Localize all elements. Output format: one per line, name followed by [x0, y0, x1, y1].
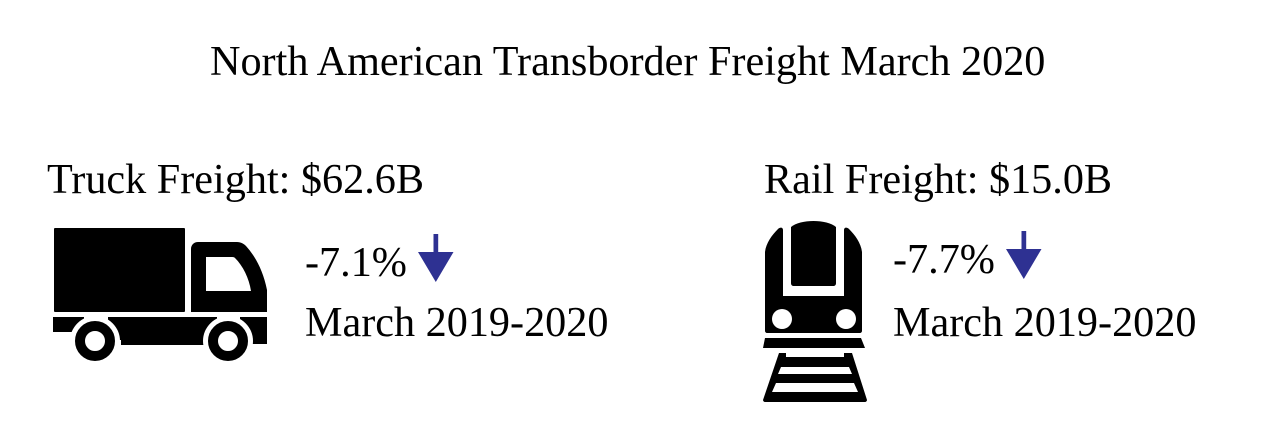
period: rail: March 2019-2020 [893, 298, 1196, 346]
change: rail percent: -7.7% [893, 236, 995, 283]
period: truck: March 2019-2020 [305, 298, 608, 346]
icon: truck down arrow [418, 234, 454, 282]
panel: rail freight [763, 156, 1196, 402]
icon: truck [53, 228, 267, 361]
heading: rail freight value: Rail Freight: $15.0B [764, 156, 1112, 203]
icon: rail down arrow [1006, 231, 1042, 279]
icon: train [763, 221, 867, 402]
panel: truck freight [47, 156, 608, 361]
title: North American Transborder Freight March 2020 [210, 38, 1045, 85]
heading: truck freight value: Truck Freight: $62.6B [47, 156, 424, 203]
change: truck percent: -7.1% [305, 239, 407, 286]
